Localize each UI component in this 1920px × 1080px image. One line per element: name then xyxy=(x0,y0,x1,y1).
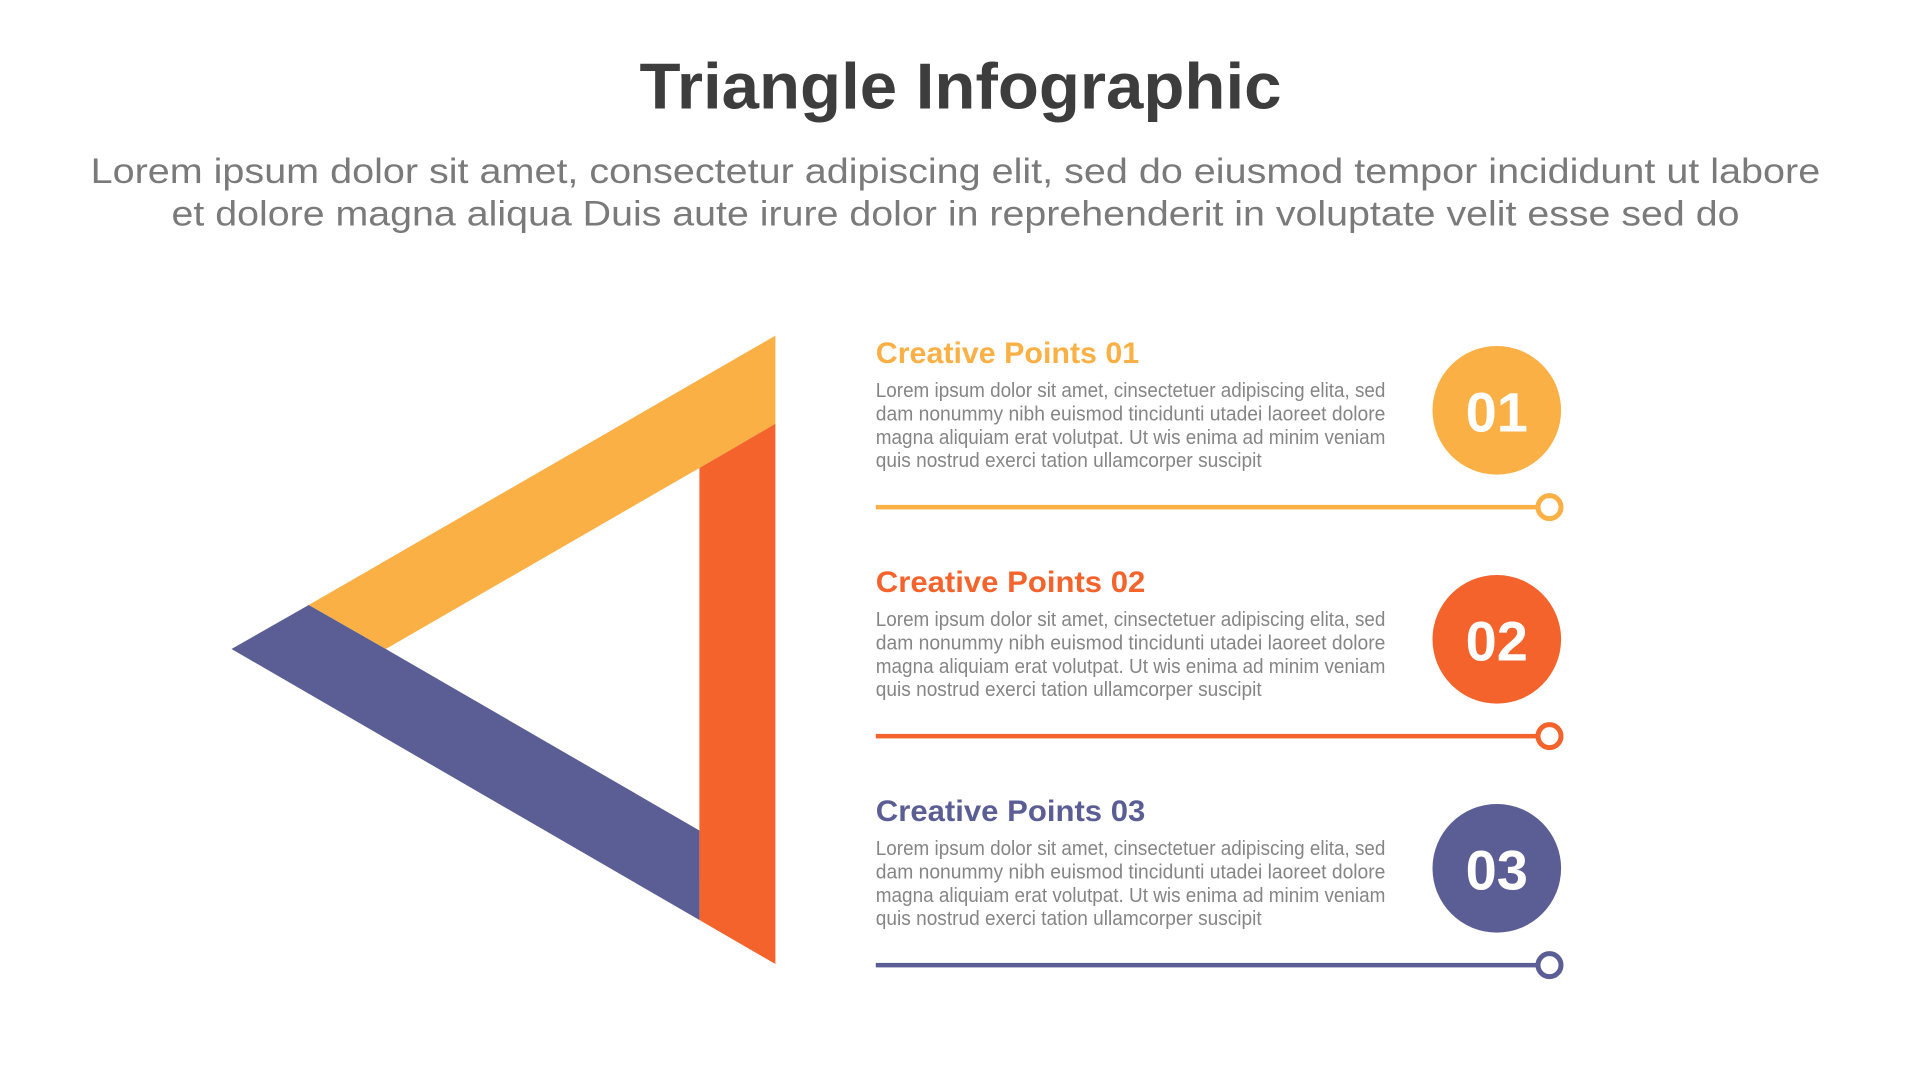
number badge 01: 01 xyxy=(1466,380,1528,444)
body text 01: dam nonummy nibh euismod tincidunti utadei laoreet dolore xyxy=(876,403,1385,425)
subtitle: Lorem ipsum dolor sit amet, consectetur adipiscing elit, sed do eiusmod tempor incididunt ut labore xyxy=(91,151,1820,191)
triangle side: orange xyxy=(699,424,775,964)
number badge 01 xyxy=(1432,346,1561,475)
heading 02: Creative Points 02 xyxy=(876,566,1145,599)
subtitle xyxy=(91,151,1820,234)
body text 03: dam nonummy nibh euismod tincidunti utadei laoreet dolore xyxy=(876,861,1385,883)
title: Triangle Infographic xyxy=(640,50,1282,122)
body text 01 xyxy=(876,380,1385,472)
body text 01: Lorem ipsum dolor sit amet, cinsectetuer adipiscing elita, sed xyxy=(876,380,1385,402)
body text 02: Lorem ipsum dolor sit amet, cinsectetuer adipiscing elita, sed xyxy=(876,609,1385,631)
body text 01: magna aliquiam erat volutpat. Ut wis enima ad minim veniam xyxy=(876,427,1385,449)
body text 02: dam nonummy nibh euismod tincidunti utadei laoreet dolore xyxy=(876,632,1385,654)
number badge 02 xyxy=(1432,575,1561,704)
body text 03: magna aliquiam erat volutpat. Ut wis enima ad minim veniam xyxy=(876,885,1385,907)
body text 02 xyxy=(876,609,1385,701)
subtitle: et dolore magna aliqua Duis aute irure dolor in reprehenderit in voluptate velit esse sed do xyxy=(172,194,1740,234)
body text 03: Lorem ipsum dolor sit amet, cinsectetuer adipiscing elita, sed xyxy=(876,838,1385,860)
heading 01: Creative Points 01 xyxy=(876,337,1139,370)
timeline line 03 xyxy=(876,954,1561,977)
body text 03 xyxy=(876,838,1385,930)
triangle side: purple xyxy=(232,605,699,920)
number badge 03 xyxy=(1432,804,1561,933)
body text 02: magna aliquiam erat volutpat. Ut wis enima ad minim veniam xyxy=(876,656,1385,678)
timeline line 01 xyxy=(876,496,1561,519)
timeline line 02 xyxy=(876,725,1561,748)
number badge 02: 02 xyxy=(1466,610,1528,672)
triangle side: yellow xyxy=(309,336,775,649)
heading 03: Creative Points 03 xyxy=(876,795,1145,828)
panel: creative point 03 xyxy=(876,795,1561,977)
triangle diagram xyxy=(232,336,775,964)
number badge 03: 03 xyxy=(1466,838,1528,902)
body text 03: quis nostrud exerci tation ullamcorper suscipit xyxy=(876,908,1262,930)
body text 02: quis nostrud exerci tation ullamcorper suscipit xyxy=(876,679,1262,701)
panel: creative point 01 xyxy=(876,337,1561,519)
body text 01: quis nostrud exerci tation ullamcorper suscipit xyxy=(876,450,1262,472)
panel: creative point 02 xyxy=(876,566,1561,748)
